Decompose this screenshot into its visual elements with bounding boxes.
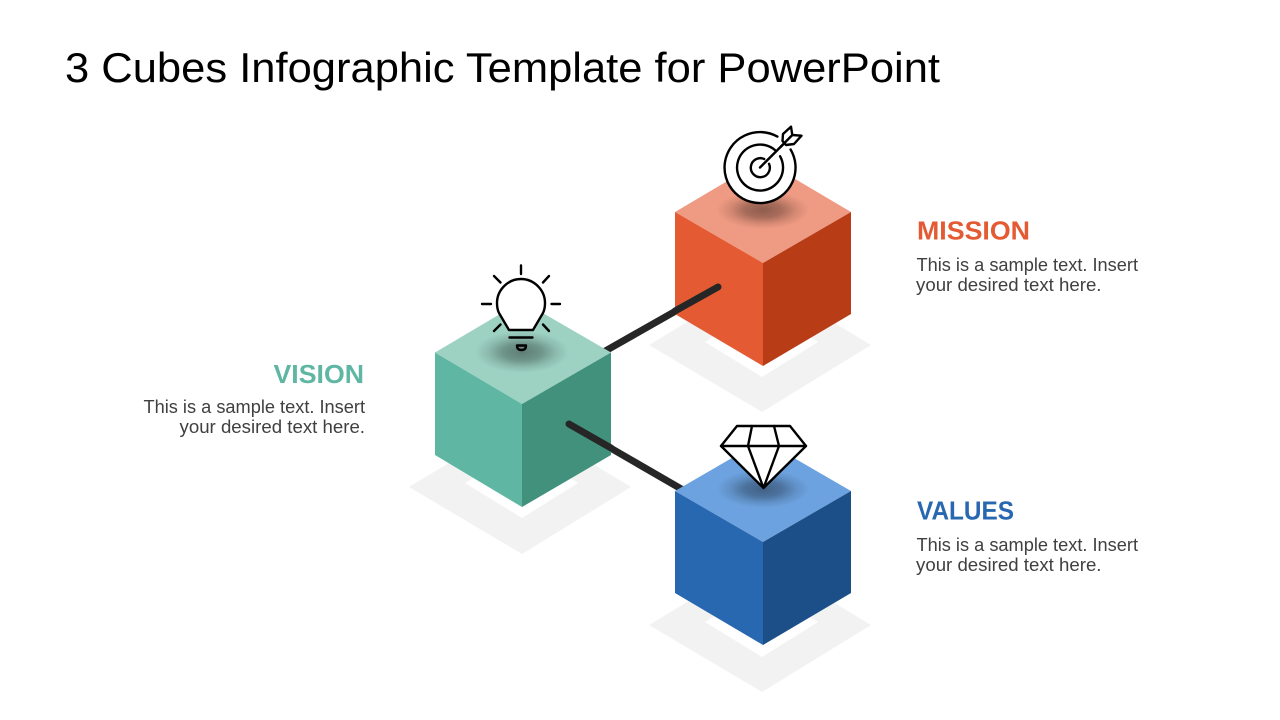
text block: vision: This is a sample text. Insert	[144, 397, 365, 417]
connector overlay on vision cube	[569, 424, 611, 448]
icon: light bulb	[482, 266, 560, 350]
text block: vision: VISION	[274, 361, 364, 389]
text block: mission: MISSION	[917, 218, 1030, 246]
cube: values	[675, 440, 851, 645]
text block: values: This is a sample text. Insert	[916, 535, 1138, 555]
floor shadow: mission cube	[649, 278, 871, 412]
floor shadow: vision cube	[409, 420, 631, 554]
text block: values: VALUES	[917, 498, 1014, 526]
text block: values	[916, 498, 1138, 575]
floor shadow: values cube	[649, 558, 871, 692]
text block: vision: your desired text here.	[180, 417, 365, 437]
icon: diamond	[721, 426, 806, 488]
text block: values: your desired text here.	[916, 555, 1102, 575]
icon: target with arrow	[724, 127, 802, 203]
connector overlay on mission cube	[675, 287, 718, 311]
text block: mission: This is a sample text. Insert	[916, 255, 1138, 275]
text block: vision	[144, 361, 365, 437]
text block: mission	[916, 218, 1138, 295]
connector: vision to mission	[600, 287, 718, 354]
cube: vision	[435, 301, 611, 507]
connector: vision to values	[569, 424, 690, 494]
title: 3 Cubes Infographic Template for PowerPoint	[65, 44, 940, 91]
cube: mission	[675, 160, 851, 366]
text block: mission: your desired text here.	[916, 275, 1102, 295]
